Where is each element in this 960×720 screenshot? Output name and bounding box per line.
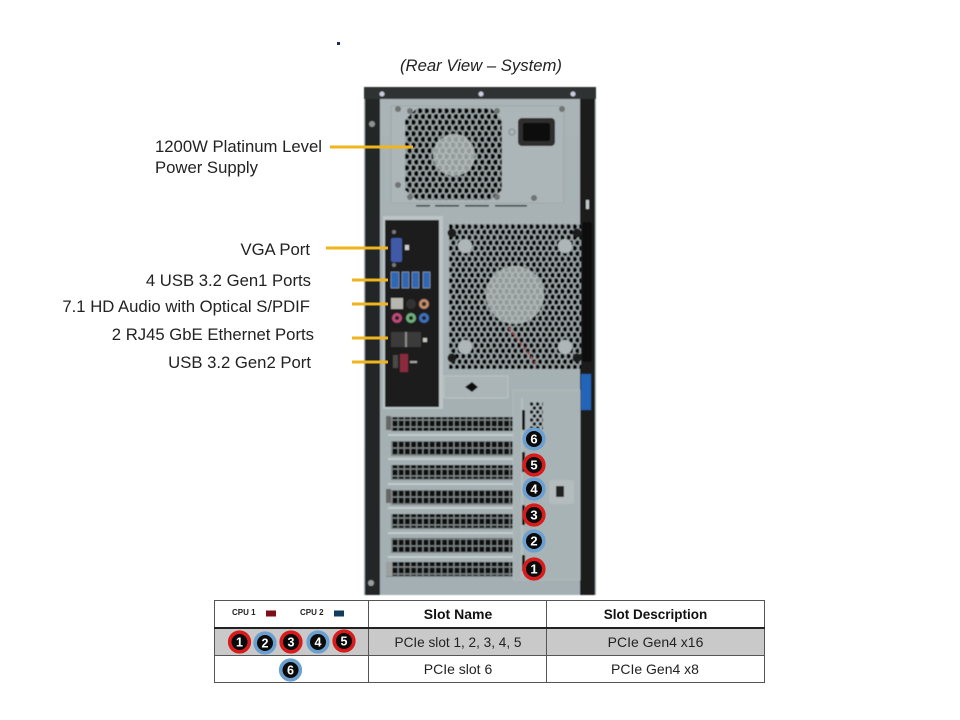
row 1 badges: 3 — [288, 636, 295, 650]
badge 3 — [524, 505, 544, 525]
power supply — [391, 106, 565, 207]
USB 3.2 Gen1 ports — [391, 272, 430, 288]
callout: USB 3.2 Gen1 ports: 4 USB 3.2 Gen1 Ports — [146, 271, 311, 290]
row 1 badges: 5 — [341, 634, 348, 648]
expansion slot vents — [386, 390, 580, 580]
audio ports and optical S/PDIF — [391, 298, 429, 323]
vent mark — [444, 376, 508, 398]
table grid — [214, 600, 765, 683]
badge 5: 5 — [530, 458, 538, 472]
header remnant mark — [337, 42, 340, 45]
CPU legend: CPU 2 — [300, 608, 324, 617]
badge 2 — [524, 531, 544, 551]
callout: Ethernet ports: 2 RJ45 GbE Ethernet Ports — [112, 325, 314, 344]
row 1 badges — [230, 631, 354, 653]
shaded row — [214, 628, 764, 655]
callout: VGA port: VGA Port — [240, 240, 310, 259]
badge 6 — [524, 429, 544, 449]
CPU legend: CPU 1 — [232, 608, 256, 617]
row 1 slot name: PCIe slot 1, 2, 3, 4, 5 — [395, 635, 521, 650]
callout: power supply: 1200W Platinum Level — [155, 137, 322, 156]
row 1 badges: 4 — [315, 636, 322, 650]
slot table — [214, 600, 765, 683]
row 1 description: PCIe Gen4 x16 — [608, 634, 704, 650]
badge 6: 6 — [530, 432, 538, 446]
callout: USB 3.2 Gen2 port: USB 3.2 Gen2 Port — [168, 353, 311, 372]
slot number badges on chassis — [524, 429, 544, 579]
right side cable and latch — [581, 200, 592, 410]
chassis photo — [364, 87, 596, 595]
badge 4: 4 — [530, 482, 538, 496]
badge 4 — [524, 479, 544, 499]
callout: power supply — [155, 137, 413, 177]
rear system fan — [448, 224, 582, 369]
subtitle: (Rear View – System) — [400, 56, 562, 75]
row 2 badge — [281, 660, 300, 680]
RJ45 Ethernet ports — [391, 332, 427, 347]
USB 3.2 Gen2 port — [393, 354, 417, 372]
badge 2: 2 — [530, 534, 538, 548]
callout: power supply: Power Supply — [155, 158, 259, 177]
callout: HD audio: 7.1 HD Audio with Optical S/PDIF — [62, 297, 310, 316]
badge 5 — [524, 455, 544, 475]
VGA connector — [391, 230, 409, 267]
row 1 badges: 1 — [236, 636, 243, 650]
rear I/O panel — [383, 216, 443, 409]
server chassis rear view — [62, 87, 765, 683]
row 2 badge: 6 — [287, 664, 294, 678]
row 1 badges: 2 — [262, 636, 269, 650]
row 2 description: PCIe Gen4 x8 — [611, 661, 699, 677]
badge 1: 1 — [530, 562, 538, 576]
row 2 slot name: PCIe slot 6 — [424, 661, 492, 677]
badge 3: 3 — [530, 508, 538, 522]
column heading: Slot Name: Slot Name — [424, 606, 492, 622]
badge 1 — [524, 559, 544, 579]
column heading: Slot Description: Slot Description — [604, 607, 707, 622]
CPU legend — [232, 608, 344, 617]
